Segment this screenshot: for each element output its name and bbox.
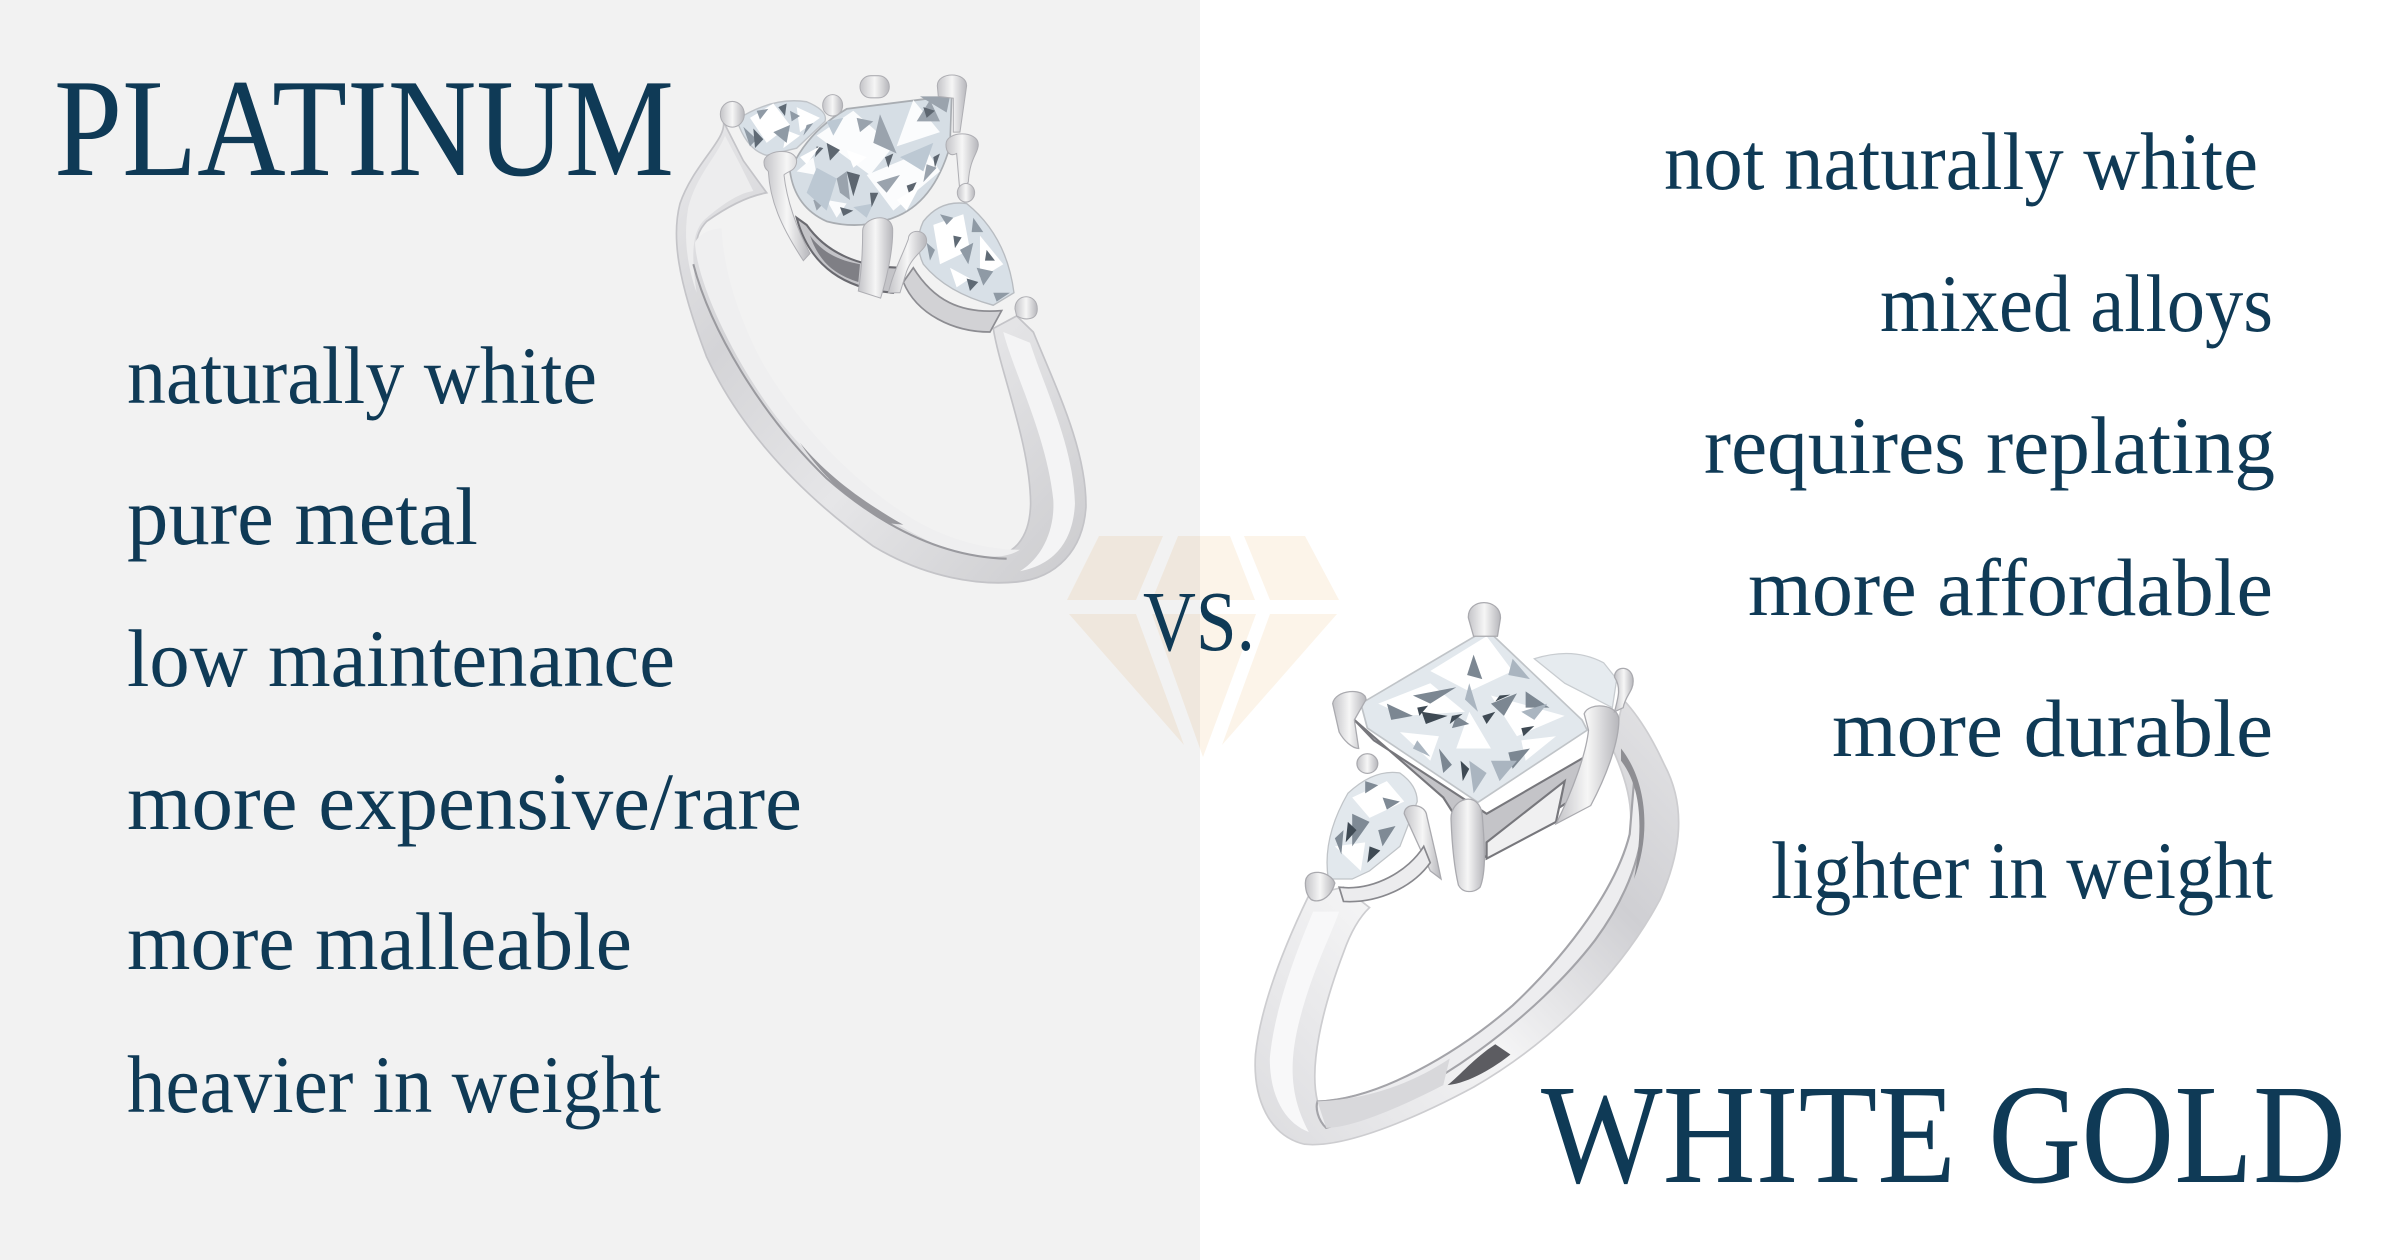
ring shank: [676, 121, 1086, 583]
item: low maintenance: [127, 613, 675, 704]
band shadow: [800, 443, 903, 525]
icon: white gold ring with princess stone: [1255, 603, 1679, 1145]
item: more malleable: [127, 896, 632, 987]
right shoulder highlight: [1003, 332, 1075, 571]
item: more affordable: [1748, 542, 2273, 633]
prongs: [720, 75, 1037, 319]
label: vs: VS.: [1143, 573, 1255, 669]
top right prong: [937, 75, 967, 132]
band mid shade: [1318, 1059, 1450, 1128]
item: heavier in weight: [127, 1039, 661, 1130]
left stone gallery: [1339, 846, 1430, 902]
item: more expensive/rare: [127, 756, 802, 847]
centre pear stone: [790, 96, 952, 225]
item: lighter in weight: [1771, 825, 2273, 916]
heading: platinum: PLATINUM: [54, 51, 674, 206]
left pear stone: [737, 101, 825, 155]
right front prong: [1556, 706, 1619, 824]
panel: platinum background: [0, 0, 1200, 1260]
item: pure metal: [127, 471, 478, 562]
princess stone: [1361, 629, 1587, 802]
item: mixed alloys: [1880, 258, 2273, 349]
icon: platinum ring with pear stones: [676, 75, 1086, 583]
item: not naturally white: [1664, 116, 2258, 207]
prongs: [1305, 603, 1633, 901]
right shoulder shading: [1621, 748, 1644, 879]
band dark reflection: [1448, 1044, 1510, 1085]
basket: [797, 218, 903, 293]
left prong: [1333, 691, 1366, 748]
left prong: [764, 151, 810, 261]
outer left prong: [1305, 872, 1335, 901]
item: more durable: [1832, 683, 2273, 774]
outer right prong: [1015, 297, 1037, 319]
left shoulder highlight: [1270, 912, 1339, 1132]
top side prong: [823, 95, 843, 116]
basket dark under stone: [810, 236, 860, 282]
right pear stone: [918, 203, 1014, 305]
list: platinum properties: [127, 330, 802, 1130]
icon: diamond watermark: [1067, 536, 1339, 757]
bottom centre prong: [858, 218, 893, 298]
item: naturally white: [127, 330, 597, 421]
right side prong: [957, 184, 975, 202]
band edge lines: [693, 264, 1007, 559]
small top prong: [1357, 754, 1378, 773]
right prong: [946, 134, 978, 193]
ring shank: [1255, 700, 1679, 1145]
band inner wall: [1317, 781, 1643, 1128]
left shoulder highlight: [686, 136, 753, 293]
inner left prong: [1404, 806, 1441, 879]
basket lower rail: [1487, 781, 1565, 859]
far right prong: [1615, 668, 1633, 712]
basket: [1354, 720, 1599, 859]
bottom front prong: [1451, 799, 1484, 892]
list: white gold properties: [1664, 116, 2275, 916]
item: requires replating: [1704, 400, 2275, 491]
inner right prong: [888, 231, 927, 293]
right stone gallery: [903, 268, 1002, 332]
left side prong: [720, 101, 744, 127]
top left prong: [860, 76, 889, 98]
band inner wall: [695, 229, 1020, 557]
top prong: [1468, 603, 1500, 636]
back pear stone: [1534, 653, 1617, 708]
left pear stone: [1327, 772, 1417, 879]
